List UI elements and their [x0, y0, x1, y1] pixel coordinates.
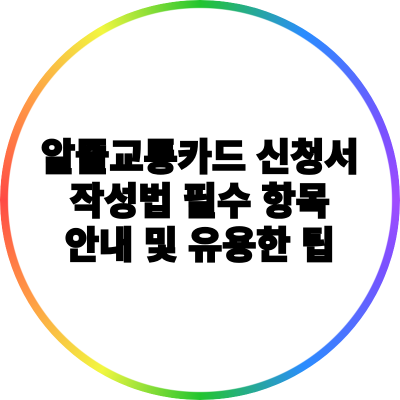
- title: [41, 137, 359, 266]
- title: 작성법 필수 항목: [70, 181, 330, 222]
- title: 알뜰교통카드 신청서: [41, 137, 359, 178]
- title: 안내 및 유용한 팁: [65, 225, 335, 266]
